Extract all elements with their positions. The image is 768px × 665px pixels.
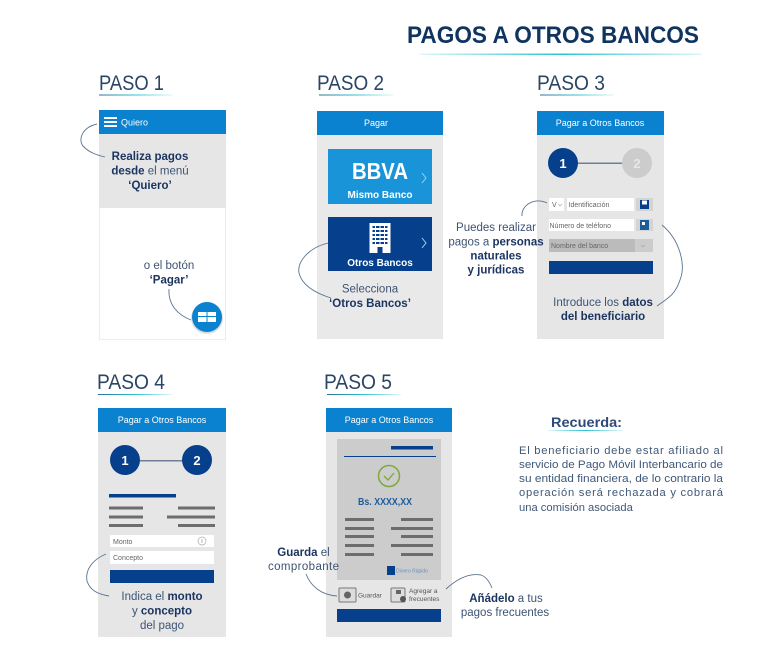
text: recuerda note xyxy=(519,445,724,514)
text: selecciona: ‘Otros Bancos’ xyxy=(329,298,411,310)
panel: recuerda xyxy=(519,414,724,514)
receipt xyxy=(337,439,441,580)
phone screen 2 xyxy=(317,111,443,339)
stepper: 2 xyxy=(193,453,201,468)
form fields xyxy=(110,535,214,583)
form fields: Nombre del banco xyxy=(551,243,608,250)
form fields: Monto xyxy=(113,539,133,546)
heading: paso 5: PASO 5 xyxy=(324,371,392,394)
stepper xyxy=(548,148,652,178)
card: mismo banco xyxy=(328,149,432,204)
text: realiza pagos: ‘Quiero’ xyxy=(128,180,172,192)
text: guarda: comprobante xyxy=(268,561,339,573)
phone screen 3 xyxy=(537,111,664,339)
text: monto: Indica el monto xyxy=(121,591,203,603)
form fields: V xyxy=(552,202,557,209)
text: anadelo: Añádelo a tus xyxy=(469,593,543,605)
text: selecciona: Selecciona xyxy=(342,284,398,296)
callout curve xyxy=(81,124,105,157)
text: realiza pagos: Realiza pagos xyxy=(112,151,188,163)
form fields: Número de teléfono xyxy=(550,223,611,230)
panel: paso 5 xyxy=(268,371,549,637)
card: otros bancos xyxy=(328,217,432,271)
action: agregar a frecuentes xyxy=(391,588,440,603)
text: realiza pagos: desde xyxy=(111,166,145,178)
text: monto: del pago xyxy=(140,620,184,632)
stepper: 1 xyxy=(121,453,129,468)
form fields: Concepto xyxy=(113,555,143,562)
icon: check xyxy=(378,466,400,486)
text: guarda: Guarda el xyxy=(277,547,330,559)
card: mismo banco: Mismo Banco xyxy=(347,190,413,201)
card: otros bancos: Otros Bancos xyxy=(347,258,413,269)
text: personas: personas xyxy=(492,236,544,248)
heading: paso 2: PASO 2 xyxy=(317,72,384,95)
text: recuerda note: una comisión asociada xyxy=(519,502,634,514)
text: monto: y xyxy=(132,606,141,618)
text: personas: y jurídicas xyxy=(468,264,524,276)
text: personas: Puedes realizar xyxy=(456,222,536,234)
text: pagar: o el botón xyxy=(144,260,194,272)
card: mismo banco: BBVA xyxy=(352,158,408,184)
heading: recuerda: Recuerda: xyxy=(551,414,622,430)
text: monto: concepto xyxy=(141,606,192,618)
stepper: 2 xyxy=(633,156,641,171)
text: recuerda note: El beneficiario debe estar afiliado al xyxy=(519,445,723,457)
panel: paso 4 xyxy=(87,371,226,637)
phone screen 4: Pagar a Otros Bancos xyxy=(118,415,207,425)
panel: paso 2 xyxy=(299,72,443,339)
text: anadelo: pagos frecuentes xyxy=(461,607,549,619)
text: datos: Introduce los datos xyxy=(553,297,653,309)
phone screen 2: Pagar xyxy=(364,118,388,128)
text: realiza pagos: el menú xyxy=(145,166,189,178)
action: guardar: Guardar xyxy=(358,592,383,600)
phone screen 5: Pagar a Otros Bancos xyxy=(345,415,434,425)
action: guardar xyxy=(339,588,383,602)
callout curve xyxy=(446,575,492,589)
callout curve xyxy=(657,225,682,306)
phone screen 5 xyxy=(326,408,452,637)
callout curve xyxy=(169,289,191,320)
callout curve xyxy=(306,574,337,596)
action: agregar a frecuentes: frecuentes xyxy=(409,596,440,603)
text: pagar: ‘Pagar’ xyxy=(150,274,188,286)
heading: paso 4: PASO 4 xyxy=(97,371,165,394)
text: datos: del beneficiario xyxy=(561,311,645,323)
stepper: 1 xyxy=(559,156,567,171)
callout curve xyxy=(299,243,331,298)
stepper xyxy=(110,445,212,475)
summary lines xyxy=(109,494,215,527)
callout curve xyxy=(522,201,547,216)
phone screen 4 xyxy=(98,408,226,637)
text: recuerda note: su entidad financiera, de lo contrario la xyxy=(519,473,724,485)
text: recuerda note: servicio de Pago Móvil Interbancario de xyxy=(519,459,723,471)
phone screen 1: Quiero xyxy=(121,118,148,128)
callout curve xyxy=(87,554,109,596)
heading: paso 3: PASO 3 xyxy=(537,72,605,95)
form fields xyxy=(549,198,653,274)
heading: paso 1: PASO 1 xyxy=(99,72,164,95)
text: recuerda note: operación será rechazada y cobrará xyxy=(519,487,724,499)
receipt: Dinero Rápido xyxy=(396,568,428,574)
text: personas: pagos a xyxy=(448,236,492,248)
icon: pagar button xyxy=(191,302,223,334)
form fields: Identificación xyxy=(568,202,609,209)
amount: Bs. XXXX,XX xyxy=(358,496,412,508)
panel: paso 1 xyxy=(81,72,226,340)
phone screen 3: Pagar a Otros Bancos xyxy=(556,118,645,128)
panel: paso 3 xyxy=(448,72,682,339)
phone screen 1 xyxy=(99,110,226,340)
title: PAGOS A OTROS BANCOS xyxy=(407,22,699,49)
text: personas: naturales xyxy=(470,250,522,262)
action: agregar a frecuentes: Agregar a xyxy=(409,588,438,595)
